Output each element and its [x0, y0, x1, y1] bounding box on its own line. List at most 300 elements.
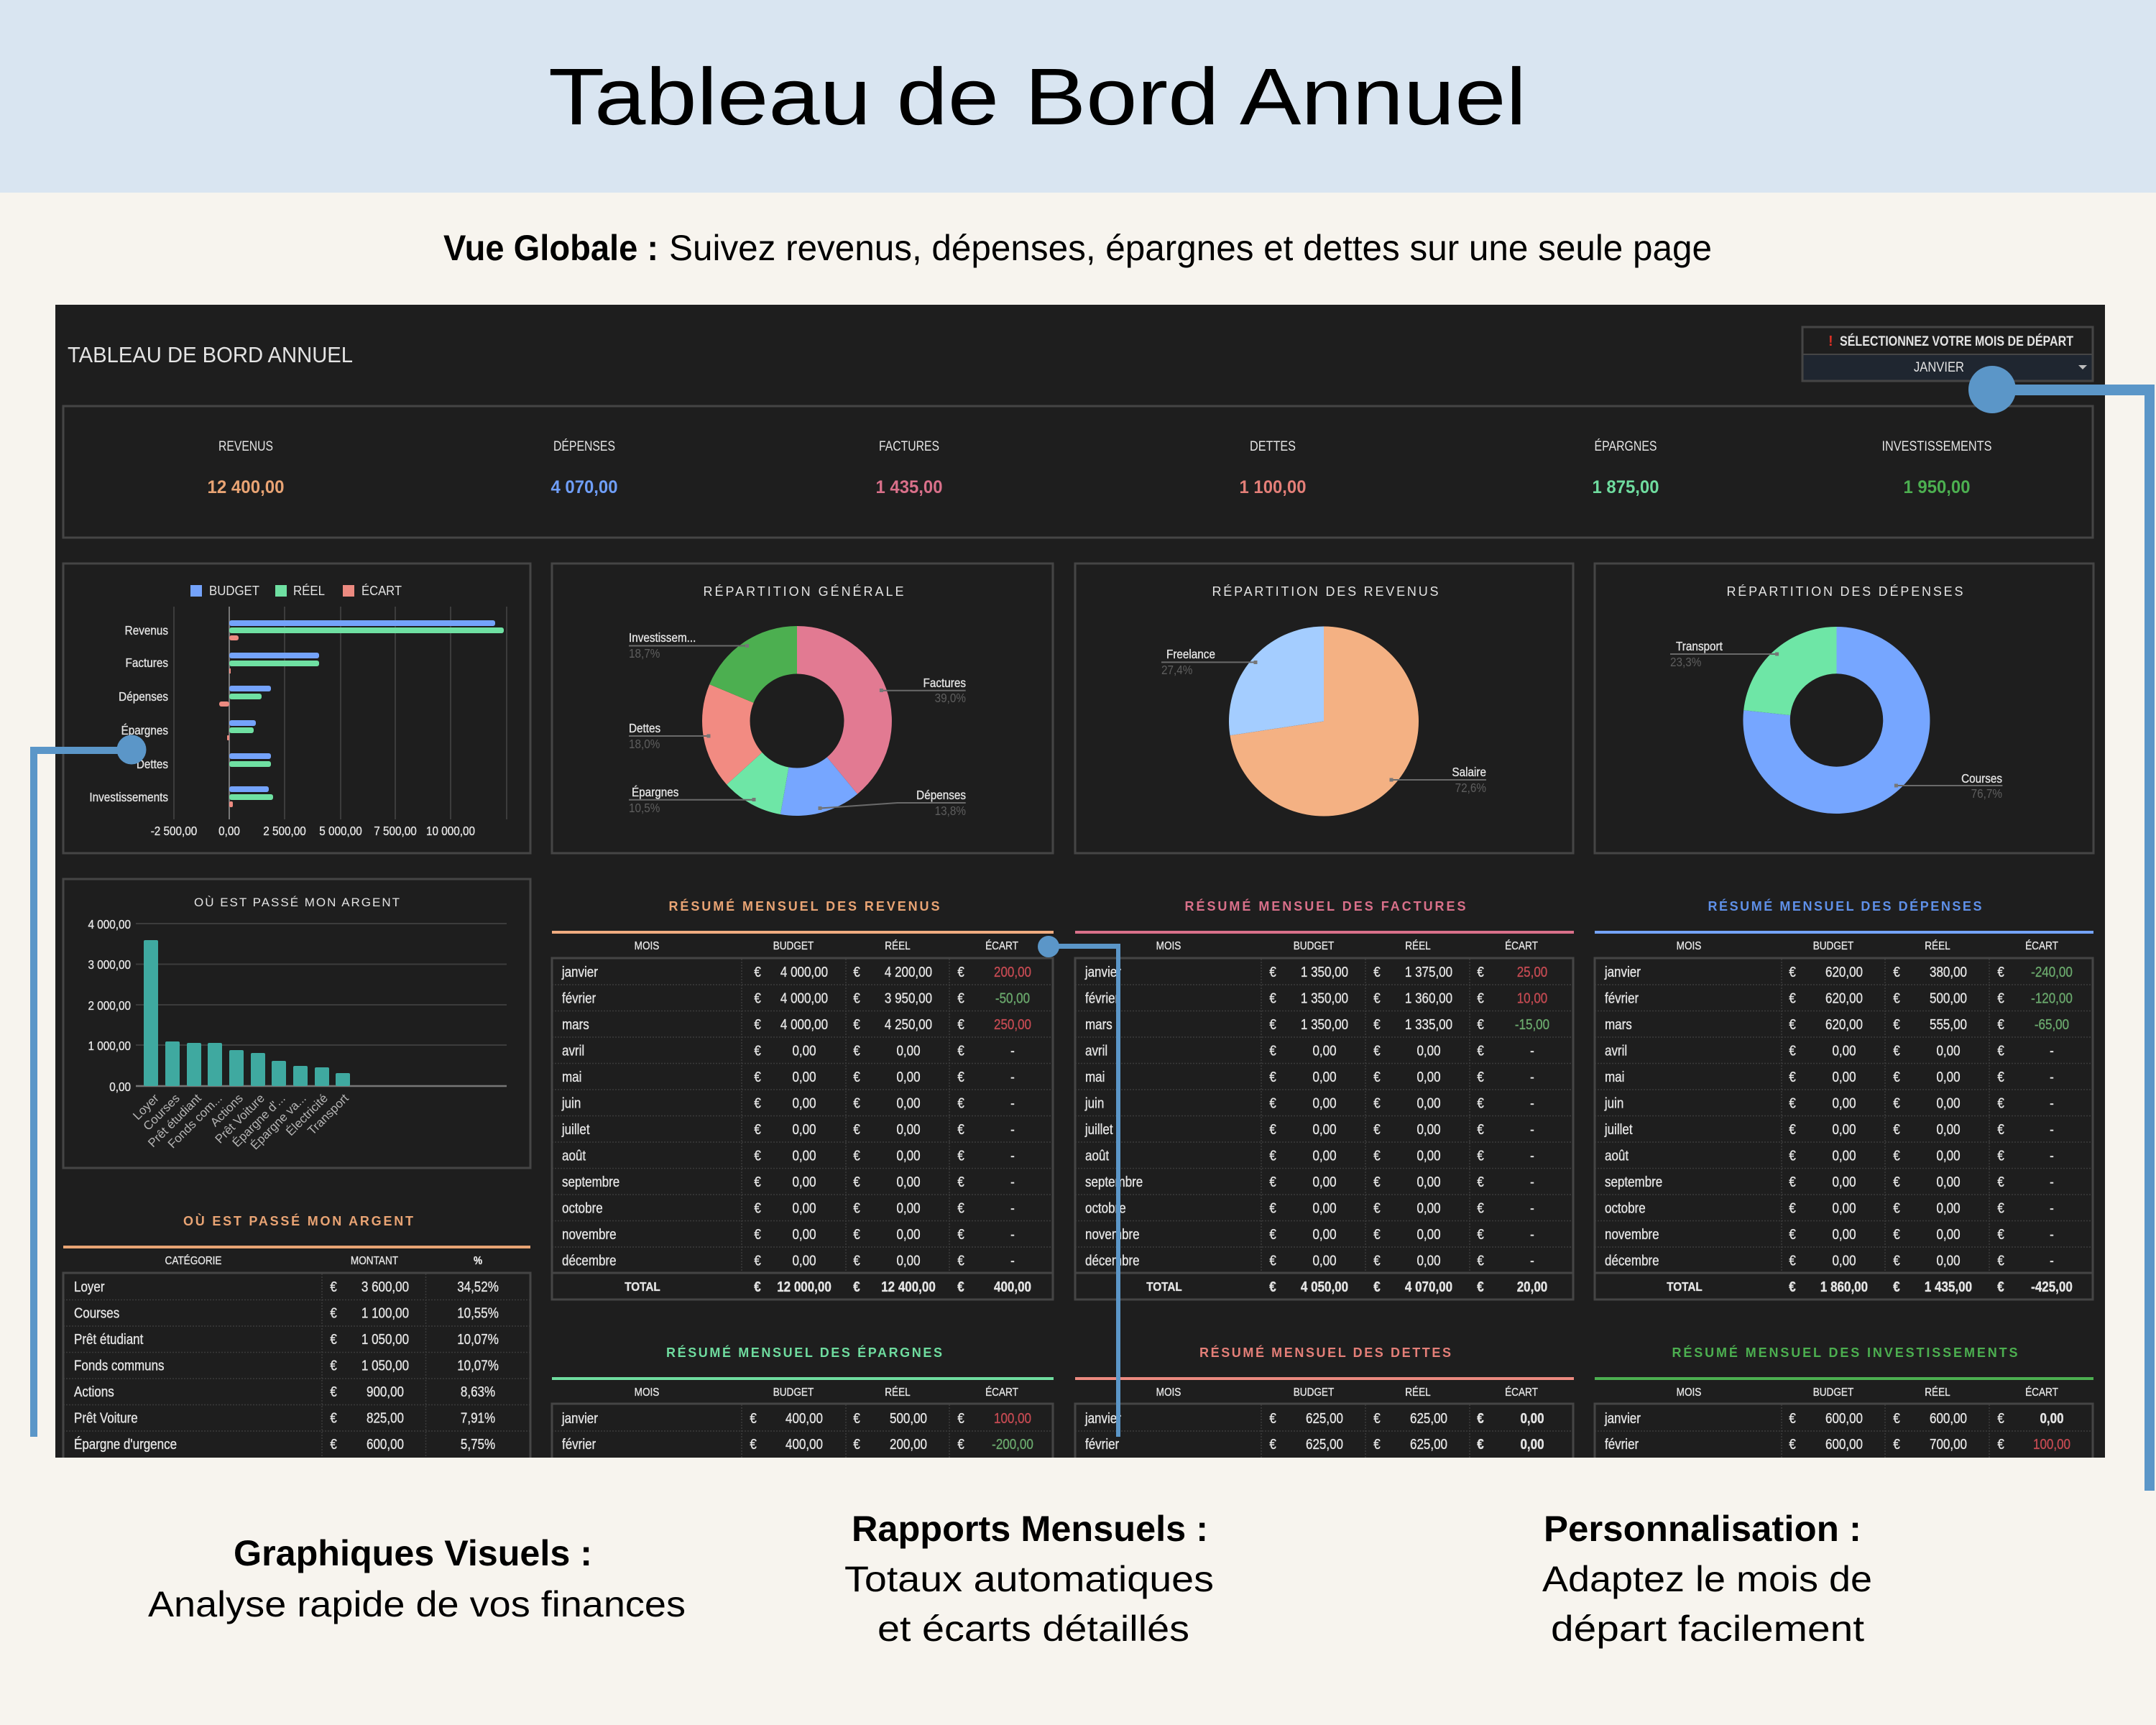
rows: €	[1373, 1410, 1381, 1426]
KPI: dettes: 1 100,00	[1239, 477, 1307, 497]
dashboard	[55, 305, 2105, 1458]
rows: €	[1373, 1069, 1381, 1085]
rows	[74, 1279, 499, 1452]
KPI: investissements: INVESTISSEMENTS	[1881, 439, 1992, 454]
rows: février	[1605, 1436, 1639, 1452]
rows: avril	[1085, 1042, 1107, 1059]
KPI: épargnes	[1593, 439, 1659, 497]
rows: €	[754, 1279, 761, 1294]
rows: €	[1477, 1042, 1484, 1059]
slice labels: 39,0%	[935, 691, 966, 705]
rows: €	[1373, 1095, 1381, 1111]
rows	[1604, 964, 2073, 1294]
rows: 620,00	[1825, 1016, 1863, 1032]
rows: -425,00	[2031, 1279, 2073, 1294]
rows: 0,00	[1312, 1174, 1337, 1190]
rows: €	[1477, 1069, 1484, 1085]
rows: €	[754, 1042, 761, 1059]
rows: 200,00	[994, 964, 1031, 980]
rows: €	[1373, 1042, 1381, 1059]
rows: €	[853, 964, 860, 980]
rows: juillet	[561, 1121, 590, 1137]
axis labels: 1 000,00	[88, 1039, 131, 1053]
rows: €	[853, 1121, 860, 1137]
slice labels	[1670, 639, 2002, 801]
header row: ÉCART	[985, 939, 1018, 952]
rows: 0,00	[1936, 1174, 1961, 1190]
rows: €	[330, 1279, 337, 1294]
header row: RÉEL	[1405, 939, 1431, 952]
rows: 1 360,00	[1405, 990, 1452, 1006]
rows: €	[957, 1095, 964, 1111]
rows: 400,00	[786, 1410, 823, 1426]
rows: €	[1373, 1016, 1381, 1032]
slice labels: 18,7%	[629, 646, 660, 661]
rows: €	[330, 1436, 337, 1452]
rows: 0,00	[792, 1147, 816, 1164]
rows: -	[1010, 1226, 1015, 1242]
rows: janvier	[561, 1410, 598, 1426]
rows: 620,00	[1825, 990, 1863, 1006]
rows: juin	[561, 1095, 581, 1111]
rows: €	[1373, 1147, 1381, 1164]
rows: €	[1477, 1226, 1484, 1242]
rows: 0,00	[1312, 1226, 1337, 1242]
rows: 825,00	[367, 1409, 404, 1426]
rows: 20,00	[1517, 1279, 1547, 1294]
rows: novembre	[1605, 1226, 1659, 1242]
rows: 0,00	[896, 1200, 921, 1216]
slice labels: Investissem...	[629, 630, 696, 645]
KPI: dettes	[1239, 439, 1307, 497]
slice labels: Salaire	[1452, 765, 1486, 779]
rows: juillet	[1084, 1121, 1113, 1137]
rows: €	[1893, 1121, 1900, 1137]
rows: -	[1010, 1174, 1015, 1190]
rows: €	[1997, 1121, 2004, 1137]
rows: €	[1893, 1252, 1900, 1269]
rows: décembre	[1085, 1252, 1140, 1269]
rows: 0,00	[1936, 1095, 1961, 1111]
value axis: 2 500,00	[263, 824, 306, 838]
rows: €	[1477, 1147, 1484, 1164]
rows: août	[562, 1147, 586, 1164]
rows: 0,00	[1936, 1147, 1961, 1164]
heading: RÉPARTITION DES REVENUS	[1212, 584, 1439, 599]
rows: €	[957, 990, 964, 1006]
category labels: Factures	[126, 656, 168, 670]
rows	[561, 1410, 1033, 1452]
category labels	[89, 623, 168, 804]
rows: 0,00	[1312, 1095, 1337, 1111]
heading: RÉSUMÉ MENSUEL DES DETTES	[1199, 1345, 1451, 1360]
KPI: investissements	[1881, 439, 1992, 497]
rows: -	[2050, 1174, 2054, 1190]
rows: 0,00	[896, 1069, 921, 1085]
rows: septembre	[562, 1174, 619, 1190]
rows: décembre	[562, 1252, 617, 1269]
rows: €	[1893, 964, 1900, 980]
rows: juin	[1604, 1095, 1623, 1111]
rows: €	[1893, 1436, 1900, 1452]
rows: 0,00	[1520, 1410, 1544, 1426]
rows: septembre	[1085, 1174, 1143, 1190]
rows: €	[1893, 1279, 1900, 1294]
month selector	[1802, 327, 2093, 381]
rows: €	[1789, 1252, 1796, 1269]
rows: €	[1373, 1252, 1381, 1269]
header band	[0, 0, 2156, 193]
rows: décembre	[1605, 1252, 1659, 1269]
rows: €	[1893, 1226, 1900, 1242]
rows: €	[1789, 1410, 1796, 1426]
rows: 0,00	[1416, 1095, 1441, 1111]
rows: -65,00	[2035, 1016, 2069, 1032]
rows: 34,52%	[457, 1279, 499, 1294]
value axis: 7 500,00	[374, 824, 417, 838]
table: résumé mensuel des factures	[1075, 898, 1574, 1300]
rows: €	[957, 1200, 964, 1216]
rows: €	[853, 1042, 860, 1059]
header row	[1156, 939, 1538, 952]
rows: 0,00	[1416, 1200, 1441, 1216]
rows: €	[330, 1305, 337, 1321]
slice labels: 23,3%	[1670, 655, 1701, 669]
rows: 0,00	[1416, 1147, 1441, 1164]
rows: €	[1477, 964, 1484, 980]
rows: €	[1997, 1436, 2004, 1452]
slice labels: Épargnes	[632, 785, 678, 799]
header row: CATÉGORIE	[165, 1254, 222, 1267]
dashboard heading: TABLEAU DE BORD ANNUEL	[68, 342, 353, 367]
rows: €	[1269, 1226, 1276, 1242]
rows: €	[1893, 990, 1900, 1006]
rows: 0,00	[896, 1121, 921, 1137]
slice labels: 10,5%	[629, 801, 660, 815]
slice labels: 18,0%	[629, 737, 660, 751]
rows: -	[1010, 1042, 1015, 1059]
rows: €	[754, 1252, 761, 1269]
rows: €	[1477, 990, 1484, 1006]
heading: RÉPARTITION GÉNÉRALE	[703, 584, 904, 599]
rotated labels: Prêt Voiture	[213, 1091, 267, 1146]
rows: €	[1269, 1410, 1276, 1426]
rows: 10,07%	[457, 1331, 499, 1347]
rows: 10,55%	[457, 1305, 499, 1321]
rows: €	[1789, 1042, 1796, 1059]
rows: 0,00	[1832, 1069, 1856, 1085]
rows: avril	[1605, 1042, 1627, 1059]
rows: 600,00	[367, 1436, 404, 1452]
rows: -	[2050, 1095, 2054, 1111]
rows: novembre	[1085, 1226, 1140, 1242]
rows: -200,00	[992, 1436, 1033, 1452]
rows: 1 860,00	[1820, 1279, 1868, 1294]
KPI: dépenses	[550, 439, 618, 497]
table: où est passé mon argent	[63, 1213, 530, 1458]
header row	[1677, 1386, 2058, 1399]
KPI: dépenses: 4 070,00	[550, 477, 618, 497]
slice labels: 13,8%	[935, 804, 966, 818]
rows: €	[1893, 1174, 1900, 1190]
callout connector: graphiques visuels	[30, 735, 147, 1437]
rows: 1 050,00	[361, 1331, 409, 1347]
KPI: factures: FACTURES	[879, 439, 939, 454]
rows: €	[754, 1200, 761, 1216]
rows: €	[1269, 1016, 1276, 1032]
rows: 7,91%	[461, 1409, 495, 1426]
rotated labels: Épargne va...	[248, 1091, 309, 1152]
rows: €	[853, 1252, 860, 1269]
rows: -120,00	[2031, 990, 2073, 1006]
KPI: épargnes: 1 875,00	[1593, 477, 1659, 497]
header row: MOIS	[1156, 940, 1181, 952]
rows: €	[1477, 1121, 1484, 1137]
header row: ÉCART	[1505, 939, 1538, 952]
rows: -	[2050, 1200, 2054, 1216]
rows: 555,00	[1930, 1016, 1967, 1032]
slice labels	[629, 630, 966, 818]
rows: €	[1269, 964, 1276, 980]
rows: avril	[562, 1042, 584, 1059]
rows: 0,00	[1312, 1200, 1337, 1216]
rows: €	[1269, 990, 1276, 1006]
rows: -	[1530, 1147, 1534, 1164]
rows: -	[1530, 1069, 1534, 1085]
rows: €	[330, 1384, 337, 1399]
rows: €	[1477, 1436, 1484, 1452]
rows: 500,00	[1930, 990, 1967, 1006]
rows: 1 375,00	[1405, 964, 1452, 980]
rows: €	[1373, 1174, 1381, 1190]
panel: KPI summary	[63, 406, 2093, 538]
KPI: investissements: 1 950,00	[1903, 477, 1971, 497]
header row	[1677, 939, 2058, 952]
rows: €	[1477, 1200, 1484, 1216]
rows: -	[1010, 1200, 1015, 1216]
donut chart	[1743, 627, 1930, 814]
rows: €	[1373, 990, 1381, 1006]
rows: 600,00	[1930, 1410, 1967, 1426]
slice labels: Dépenses	[916, 788, 966, 802]
category labels: Épargnes	[121, 723, 168, 737]
rows: €	[853, 1147, 860, 1164]
table: résumé mensuel des investissements	[1595, 1345, 2093, 1458]
rows: -	[1530, 1226, 1534, 1242]
header row: MONTANT	[351, 1255, 398, 1267]
rotated labels: Actions	[208, 1091, 246, 1129]
rows: €	[1997, 1200, 2004, 1216]
header row: BUDGET	[773, 940, 814, 952]
rows: 0,00	[1936, 1069, 1961, 1085]
header row: ÉCART	[2025, 939, 2058, 952]
rows: 0,00	[1936, 1252, 1961, 1269]
rows: €	[853, 1410, 860, 1426]
legend: RÉEL	[293, 584, 325, 598]
rows: Prêt étudiant	[74, 1331, 144, 1347]
rows: €	[853, 1226, 860, 1242]
rows: €	[1269, 1279, 1276, 1294]
rows: €	[1373, 964, 1381, 980]
header row: ÉCART	[1505, 1386, 1538, 1399]
header row	[165, 1254, 482, 1267]
slice labels: Factures	[923, 676, 966, 690]
rows: mars	[562, 1016, 589, 1032]
rows: €	[957, 1226, 964, 1242]
rows: 0,00	[792, 1252, 816, 1269]
subtitle: Vue Globale :	[443, 228, 658, 268]
header row: MOIS	[635, 940, 659, 952]
rows: -	[2050, 1121, 2054, 1137]
caption: personnalisation: Personnalisation :	[1544, 1509, 1861, 1549]
rows: septembre	[1605, 1174, 1662, 1190]
rows: 600,00	[1825, 1410, 1863, 1426]
header row: BUDGET	[1813, 940, 1853, 952]
rows: €	[1373, 1279, 1381, 1294]
rows: €	[957, 1121, 964, 1137]
rows: 4 050,00	[1301, 1279, 1348, 1294]
rows	[561, 964, 1031, 1294]
rows: 0,00	[792, 1174, 816, 1190]
rows: 1 050,00	[361, 1357, 409, 1374]
rows: août	[1085, 1147, 1110, 1164]
rows: €	[957, 1174, 964, 1190]
rows: 0,00	[1936, 1121, 1961, 1137]
rows: €	[1477, 1279, 1484, 1294]
rows: €	[957, 1436, 964, 1452]
rows: €	[1269, 1121, 1276, 1137]
rows: 0,00	[1416, 1042, 1441, 1059]
rows: €	[1997, 1252, 2004, 1269]
rows: €	[1893, 1016, 1900, 1032]
slice labels: Courses	[1961, 771, 2002, 786]
rows: février	[1085, 990, 1119, 1006]
rotated labels: Courses	[141, 1091, 183, 1133]
heading: RÉPARTITION DES DÉPENSES	[1726, 584, 1963, 599]
caption: personnalisation	[1542, 1509, 1872, 1649]
rows: 4 070,00	[1405, 1279, 1452, 1294]
bars	[144, 940, 350, 1086]
rows: €	[853, 990, 860, 1006]
rows: 4 000,00	[780, 1016, 828, 1032]
rows: €	[957, 1410, 964, 1426]
rows: août	[1605, 1147, 1629, 1164]
rows: -	[1530, 1200, 1534, 1216]
heading: RÉSUMÉ MENSUEL DES DÉPENSES	[1708, 898, 1982, 914]
bars	[219, 620, 504, 807]
rows: €	[957, 1279, 964, 1294]
rows: -	[1010, 1147, 1015, 1164]
rows: €	[853, 1200, 860, 1216]
KPI: factures: 1 435,00	[875, 477, 943, 497]
table: résumé mensuel des dettes	[1075, 1345, 1574, 1458]
KPI: dépenses: DÉPENSES	[553, 439, 615, 454]
rows: 0,00	[1832, 1121, 1856, 1137]
panel: où est passé mon argent chart	[63, 879, 530, 1168]
rows: -	[1530, 1174, 1534, 1190]
rows: €	[1269, 1436, 1276, 1452]
rows: €	[1269, 1069, 1276, 1085]
rows: €	[750, 1436, 757, 1452]
value axis: 0,00	[218, 824, 240, 838]
axis labels: 3 000,00	[88, 957, 131, 972]
rows: janvier	[1084, 964, 1121, 980]
value axis: 10 000,00	[426, 824, 475, 838]
rows: 3 950,00	[885, 990, 932, 1006]
rows: €	[1269, 1095, 1276, 1111]
category labels: Dettes	[137, 757, 168, 771]
rows: €	[1373, 1436, 1381, 1452]
rows: €	[957, 964, 964, 980]
rows: €	[853, 1016, 860, 1032]
donut chart	[702, 626, 892, 816]
rows: 0,00	[792, 1200, 816, 1216]
rows: 0,00	[896, 1042, 921, 1059]
rows: -15,00	[1515, 1016, 1549, 1032]
rows: €	[754, 1174, 761, 1190]
rows: €	[1893, 1200, 1900, 1216]
rows: €	[1789, 1436, 1796, 1452]
rows: 0,00	[896, 1226, 921, 1242]
rows: €	[330, 1357, 337, 1374]
rows: 4 200,00	[885, 964, 932, 980]
rows: €	[1789, 990, 1796, 1006]
heading: RÉSUMÉ MENSUEL DES INVESTISSEMENTS	[1672, 1345, 2018, 1360]
rows: 0,00	[1832, 1095, 1856, 1111]
rows: 0,00	[1832, 1174, 1856, 1190]
rows: TOTAL	[1667, 1279, 1703, 1294]
rows: 25,00	[1517, 964, 1547, 980]
rows: -	[1530, 1042, 1534, 1059]
header row: %	[474, 1255, 482, 1267]
rows: 0,00	[1832, 1200, 1856, 1216]
category labels: Dépenses	[119, 689, 168, 704]
header row: RÉEL	[1925, 939, 1950, 952]
KPI: factures	[875, 439, 943, 497]
table: résumé mensuel des dépenses	[1595, 898, 2093, 1300]
header row: BUDGET	[1294, 940, 1334, 952]
rows: 0,00	[1312, 1252, 1337, 1269]
rows: €	[754, 964, 761, 980]
value axis	[151, 824, 475, 838]
month selector: JANVIER	[1914, 360, 1964, 375]
rows: 250,00	[994, 1016, 1031, 1032]
slice labels: Dettes	[629, 721, 660, 735]
rows: Actions	[74, 1384, 114, 1399]
rows: 10,07%	[457, 1357, 499, 1374]
rows: 400,00	[786, 1436, 823, 1452]
caption: graphiques visuels: Analyse rapide de vos finances	[148, 1584, 686, 1624]
panel: répartition des dépenses	[1595, 564, 2093, 853]
header row: ÉCART	[985, 1386, 1018, 1399]
rows: €	[1269, 1174, 1276, 1190]
rows: janvier	[1604, 1410, 1641, 1426]
rows: -	[2050, 1147, 2054, 1164]
slice labels: Freelance	[1166, 647, 1215, 661]
rows: €	[1997, 1410, 2004, 1426]
rows: -	[2050, 1226, 2054, 1242]
caption: rapports mensuels: Rapports Mensuels :	[852, 1509, 1208, 1549]
rows: €	[1997, 1226, 2004, 1242]
rows: 100,00	[2033, 1436, 2070, 1452]
header row: BUDGET	[1294, 1386, 1334, 1399]
legend: ÉCART	[361, 584, 402, 598]
month selector: !	[1828, 334, 1833, 349]
panel: répartition générale	[552, 564, 1053, 853]
rows: 0,00	[1832, 1147, 1856, 1164]
rows: €	[1893, 1069, 1900, 1085]
rotated labels: Prêt étudiant	[145, 1091, 204, 1150]
